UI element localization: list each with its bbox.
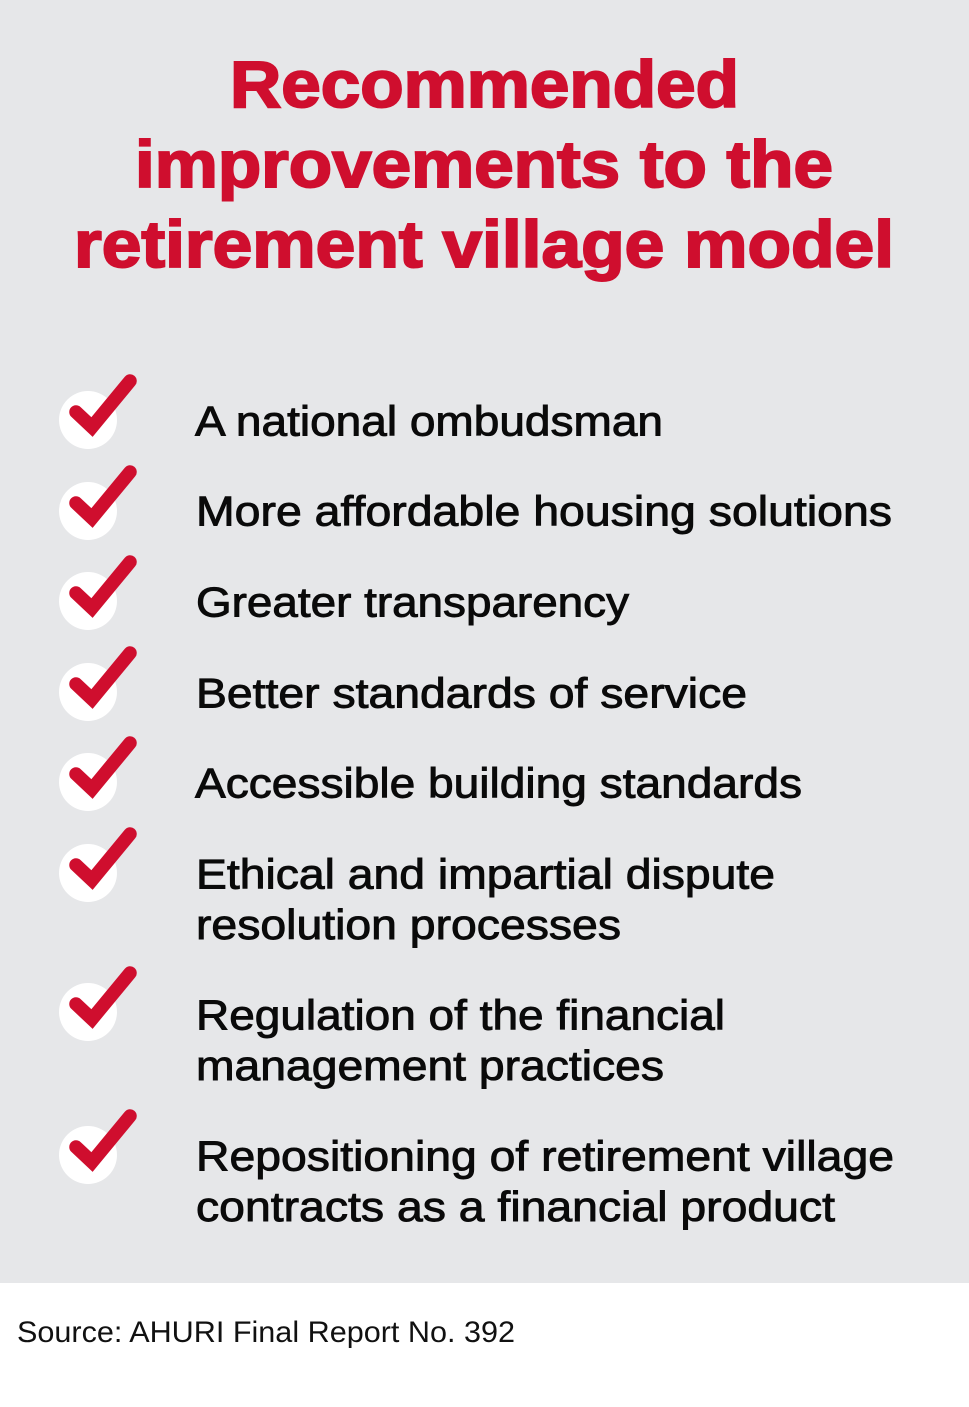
item: Accessible building standards bbox=[59, 743, 802, 811]
title: improvements to the bbox=[135, 127, 833, 201]
item: Regulation of the financial management practices bbox=[59, 973, 725, 1089]
item: More affordable housing solutions bbox=[59, 472, 892, 540]
source note: Source: AHURI Final Report No. 392 bbox=[17, 1316, 515, 1349]
item: Regulation of the financial management practices: Regulation of the financial bbox=[196, 992, 725, 1038]
item: Better standards of service bbox=[59, 653, 747, 721]
item: Accessible building standards: Accessible building standards bbox=[195, 760, 802, 806]
title: Recommended bbox=[230, 47, 739, 121]
item: Repositioning of retirement village contracts as a financial product: contracts as a financial product bbox=[196, 1183, 835, 1230]
item: Ethical and impartial dispute resolution processes: resolution processes bbox=[196, 901, 621, 948]
item: Greater transparency bbox=[59, 562, 629, 630]
item: Better standards of service: Better standards of service bbox=[196, 670, 747, 716]
item: Repositioning of retirement village contracts as a financial product bbox=[59, 1116, 894, 1230]
item: Ethical and impartial dispute resolution processes: Ethical and impartial dispute bbox=[196, 850, 775, 898]
item: A national ombudsman: A national ombudsman bbox=[195, 398, 663, 444]
title bbox=[74, 47, 894, 281]
item: A national ombudsman bbox=[59, 381, 663, 449]
item: Regulation of the financial management practices: management practices bbox=[196, 1042, 664, 1089]
item: Repositioning of retirement village contracts as a financial product: Repositioning of retirement village bbox=[196, 1132, 894, 1180]
title: retirement village model bbox=[74, 207, 894, 281]
item: More affordable housing solutions: More affordable housing solutions bbox=[196, 488, 892, 534]
item: Ethical and impartial dispute resolution processes bbox=[59, 834, 775, 948]
checklist bbox=[59, 381, 894, 1230]
item: Greater transparency: Greater transparency bbox=[196, 578, 629, 626]
